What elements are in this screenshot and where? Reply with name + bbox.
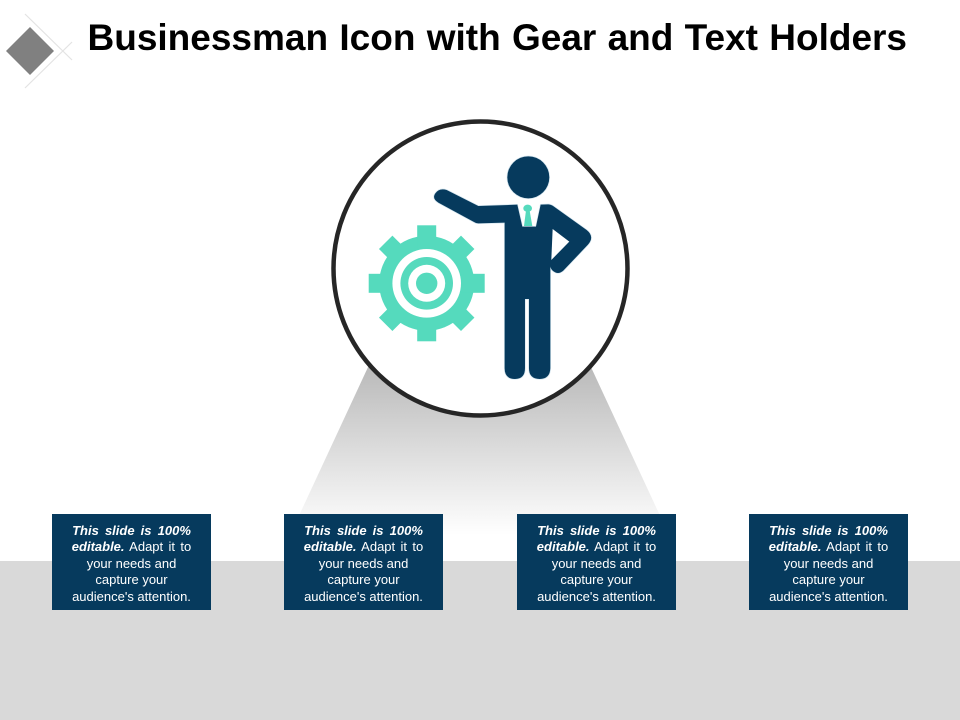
body and arms	[434, 189, 591, 379]
head	[507, 156, 549, 198]
text box 1: your needs and	[87, 556, 176, 570]
icon: gear	[369, 225, 485, 341]
circle frame	[334, 122, 628, 416]
text box 1: audience's attention.	[72, 588, 191, 604]
text box 3: This slide is 100%	[537, 522, 656, 538]
text box 1	[52, 514, 211, 610]
central icon: businessman and gear in circle	[331, 119, 630, 418]
light beam trapezoid	[300, 366, 659, 516]
text box 2: editable. Adapt it to	[304, 539, 423, 554]
text box 2: This slide is 100%	[304, 522, 423, 538]
necktie	[523, 205, 532, 226]
text box 1: editable. Adapt it to	[72, 539, 191, 554]
text box 3: capture your	[560, 572, 633, 587]
text box 4: capture your	[792, 572, 865, 587]
text box 3: editable. Adapt it to	[537, 539, 656, 554]
text box 2: audience's attention.	[304, 588, 423, 604]
text box 3	[517, 514, 676, 610]
title: Businessman Icon with Gear and Text Holders	[88, 17, 907, 58]
text box 3: your needs and	[552, 556, 641, 570]
text box 1: capture your	[95, 572, 168, 587]
text box 4: editable. Adapt it to	[769, 539, 888, 554]
icon: businessman	[434, 156, 591, 379]
text box 2: your needs and	[319, 556, 408, 570]
arm gap	[551, 229, 569, 260]
text box 4: This slide is 100%	[769, 522, 888, 538]
text box 2: capture your	[327, 572, 400, 587]
text box 4	[749, 514, 908, 610]
text box 4: audience's attention.	[769, 588, 888, 604]
text box 2	[284, 514, 443, 610]
logo: grey diamond with crossed lines	[6, 14, 72, 88]
text box 4: your needs and	[784, 556, 873, 570]
floor band	[0, 561, 960, 720]
text box 1: This slide is 100%	[72, 522, 191, 538]
text box 3: audience's attention.	[537, 588, 656, 604]
